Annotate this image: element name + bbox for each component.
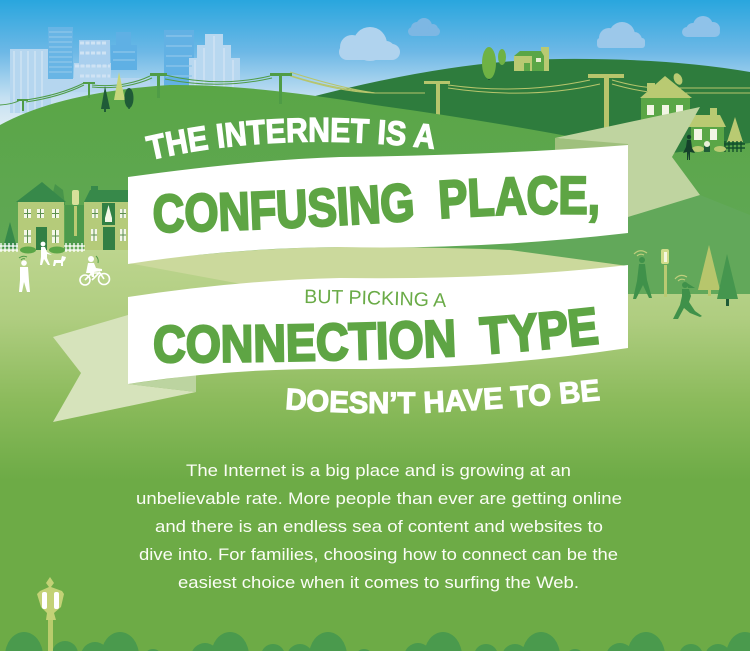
heading line 1: THE INTERNET IS A — [144, 117, 434, 160]
near hill — [0, 85, 750, 300]
far dark hill — [300, 59, 750, 230]
intro paragraph: The Internet is a big place and is growing at an — [186, 461, 571, 480]
clouds — [339, 16, 720, 61]
ground — [0, 250, 750, 480]
farm — [482, 47, 549, 80]
intro paragraph: and there is an endless sea of content and websites to — [155, 517, 603, 536]
heading line 4: CONNECTION TYPE — [154, 306, 600, 364]
people on left — [19, 242, 110, 292]
right utility poles and wires — [290, 72, 750, 146]
ribbon left tail — [53, 315, 196, 422]
intro paragraph — [136, 461, 622, 592]
heading line 2: CONFUSING PLACE, — [154, 175, 598, 234]
bushes — [5, 632, 750, 651]
heading line 3: BUT PICKING A — [306, 290, 446, 307]
sky — [0, 0, 750, 130]
heading line 5: DOESN’T HAVE TO BE — [286, 379, 600, 414]
intro paragraph: dive into. For families, choosing how to connect can be the — [139, 545, 618, 564]
right hillside patch — [510, 195, 750, 294]
woman silhouette by tail — [683, 135, 695, 160]
intro paragraph: unbelievable rate. More people than ever are getting online — [136, 489, 622, 508]
right houses — [640, 72, 745, 152]
people, lamp and trees on right — [633, 245, 738, 319]
ribbon right tail — [555, 107, 700, 217]
left houses — [0, 182, 130, 254]
street lamp — [37, 577, 64, 651]
hill trees — [101, 72, 134, 112]
lamp post front — [48, 630, 53, 651]
white banner top — [128, 145, 628, 264]
ribbon middle fold — [128, 247, 628, 300]
intro paragraph: easiest choice when it comes to surfing the Web. — [178, 573, 579, 592]
white banner bottom — [128, 265, 628, 384]
left utility poles and wires — [0, 73, 375, 111]
city skyline — [10, 27, 240, 113]
